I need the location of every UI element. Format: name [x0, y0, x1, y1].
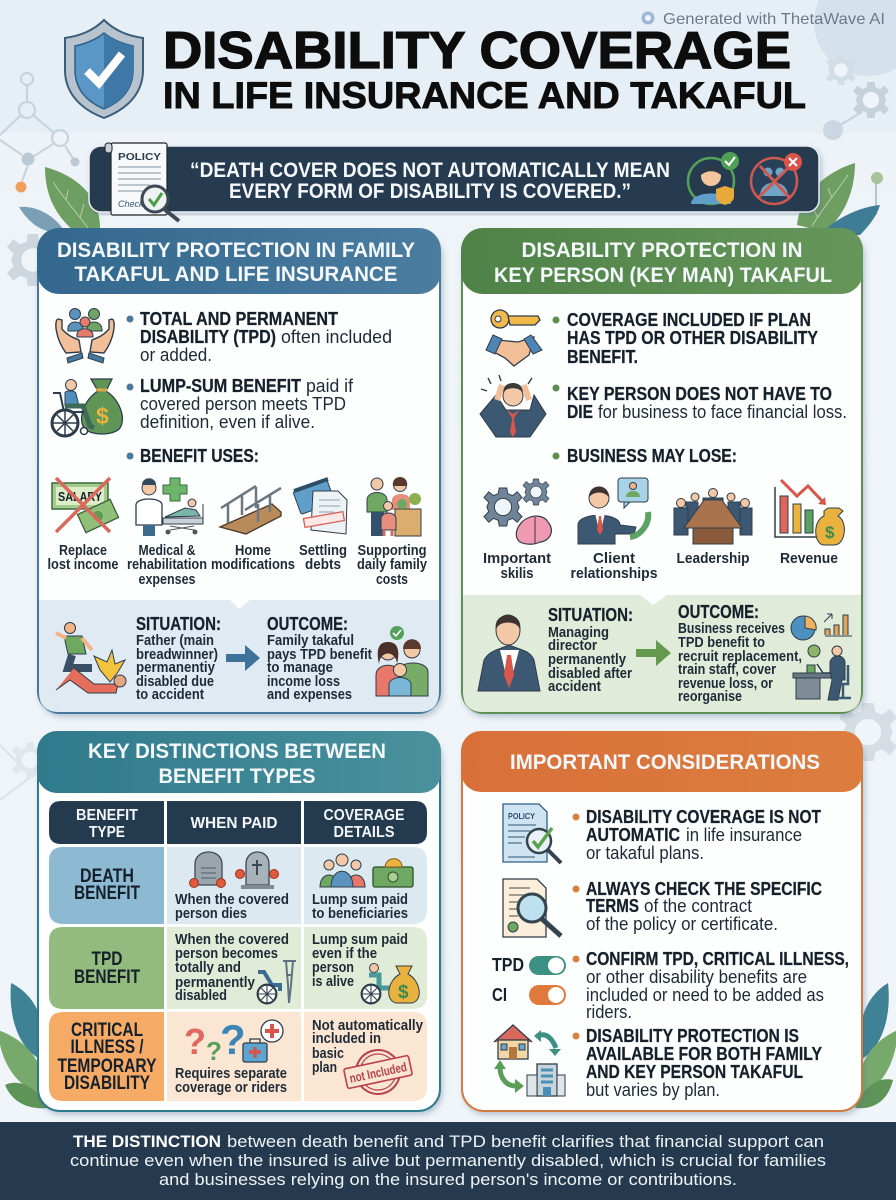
text: coverage details: person: [312, 959, 354, 976]
table header: COVERAGE: [324, 807, 405, 824]
use: settling debts: [293, 479, 347, 573]
title: DISABILITY COVERAGE: [163, 22, 791, 80]
text: lump sum: [126, 376, 354, 432]
text: when paid: [175, 891, 289, 922]
footer: between death benefit and TPD benefit clarifies that financial support can: [227, 1132, 824, 1151]
icon: policy check: [503, 804, 561, 863]
text: check terms: TERMS: [586, 896, 639, 916]
panel heading: DISABILITY PROTECTION IN FAMILY: [57, 239, 415, 262]
text: confirm benefits: [572, 949, 849, 1022]
use: medical and rehabilitation: rehabilitation: [127, 556, 207, 573]
text: lump sum: covered person meets TPD: [140, 394, 346, 414]
text: business may lose: BUSINESS MAY LOSE:: [567, 446, 737, 466]
leaves: top left: [19, 167, 100, 233]
lose: leadership: Leadership: [676, 550, 750, 567]
text: situation: director: [548, 637, 597, 654]
text: confirm benefits: or other disability benefits are: [586, 967, 807, 987]
text: outcome: income loss: [267, 673, 340, 690]
lose: leadership: [674, 488, 752, 567]
row: death benefit: DEATH: [80, 866, 134, 887]
quote text: “DEATH COVER DOES NOT AUTOMATICALLY MEAN: [190, 159, 670, 182]
text: situation: SITUATION:: [136, 614, 221, 634]
text: when paid: [175, 1065, 287, 1096]
quote text: [190, 159, 670, 203]
text: outcome: reorganise: [678, 688, 742, 705]
text: outcome: train staff, cover: [678, 661, 776, 678]
text: situation: Father (main: [136, 632, 214, 649]
text: when paid: [175, 931, 289, 1004]
title: IN LIFE INSURANCE AND TAKAFUL: [163, 75, 806, 116]
text: outcome: OUTCOME:: [678, 602, 759, 622]
icon: wheelchair and money bag: $: [398, 982, 409, 1003]
icon: family: [376, 626, 428, 696]
text: situation: disabled due: [136, 673, 214, 690]
leaves: bottom right: [855, 983, 896, 1108]
text: coverage details: included in: [312, 1030, 381, 1047]
lose: revenue: Revenue: [780, 550, 838, 567]
row: death benefit: BENEFIT: [74, 883, 140, 904]
stamp: not included: [341, 1044, 415, 1100]
text: when paid: totally and: [175, 959, 241, 976]
use: replace lost income: SALARY: [58, 489, 102, 504]
icon: wheelchair and money bag: $: [96, 403, 109, 429]
icon: tombstones: [190, 852, 278, 889]
text: situation: [548, 605, 633, 695]
icon: policy document: POLICY: [118, 151, 161, 163]
icon: questions and medical kit: ?: [220, 1016, 246, 1063]
text: outcome: to manage: [267, 659, 333, 676]
row: critical illness: [49, 1012, 427, 1101]
lose: client relationships: Client: [593, 550, 635, 567]
text: lump sum: paid if: [306, 376, 354, 396]
text: coverage details: Lump sum paid: [312, 931, 408, 948]
lose: revenue: [775, 480, 844, 567]
text: key person: KEY PERSON DOES NOT HAVE TO: [567, 384, 832, 404]
text: key person: DIE: [567, 402, 593, 422]
text: outcome: pays TPD benefit: [267, 646, 372, 663]
text: coverage included: COVERAGE INCLUDED IF PLAN: [567, 310, 811, 330]
text: confirm benefits: riders.: [586, 1002, 632, 1022]
panel heading: KEY PERSON (KEY MAN) TAKAFUL: [494, 264, 832, 287]
text: situation: breadwinner): [136, 646, 218, 663]
table header: TYPE: [89, 824, 125, 841]
text: lump sum: definition, even if alive.: [140, 412, 315, 432]
text: coverage included: BENEFIT.: [567, 347, 638, 367]
text: situation: permanently: [548, 651, 627, 668]
table header: BENEFIT: [76, 807, 138, 824]
text: situation: disabled after: [548, 665, 632, 682]
text: outcome: [267, 614, 372, 703]
text: situation: SITUATION:: [548, 605, 633, 625]
panel heading: DISABILITY PROTECTION IN: [522, 239, 802, 262]
text: situation: accident: [548, 678, 601, 695]
text: coverage details: basic: [312, 1045, 344, 1062]
text: outcome: and expenses: [267, 686, 352, 703]
panel heading: [37, 731, 441, 793]
text: check terms: of the policy or certificate.: [586, 914, 778, 934]
text: not automatic: [572, 807, 821, 863]
quote text: EVERY FORM OF DISABILITY IS COVERED.”: [229, 180, 631, 203]
lose: important skills: Important: [483, 550, 551, 567]
text: check terms: ALWAYS CHECK THE SPECIFIC: [586, 879, 822, 899]
toggle: CI: CI: [492, 985, 507, 1005]
text: available for both: AVAILABLE FOR BOTH FAMILY: [586, 1044, 822, 1064]
text: confirm benefits: CONFIRM TPD, CRITICAL ILLNESS,: [586, 949, 849, 969]
use: supporting daily family costs: [357, 477, 428, 588]
use: medical and rehabilitation: Medical &: [138, 542, 196, 559]
stamp: not included: not Included: [348, 1059, 408, 1086]
text: when paid: When the covered: [175, 931, 289, 948]
text: when paid: permanently: [175, 974, 256, 991]
arrow: [636, 640, 671, 666]
text: outcome: OUTCOME:: [267, 614, 348, 634]
panel: family takaful and life insurance: [37, 228, 441, 713]
text: outcome: [678, 602, 802, 705]
text: when paid: coverage or riders: [175, 1079, 287, 1096]
icon: wheelchair and money bag: [362, 964, 419, 1003]
footer: continue even when the insured is alive but permanently disabled, which is crucial for families: [70, 1151, 826, 1170]
text: coverage details: even if the: [312, 945, 377, 962]
use: supporting daily family costs: Supporting: [358, 542, 426, 559]
text: outcome: TPD benefit to: [678, 634, 765, 651]
footer: and businesses relying on the insured person's income or contributions.: [159, 1170, 737, 1189]
text: TPD: TOTAL AND PERMANENT: [140, 309, 338, 329]
icon: covered person: [688, 152, 739, 205]
panel: key distinctions: [0, 731, 896, 1200]
panel: key person takaful: [461, 228, 863, 713]
text: confirm benefits: included or need to be added as: [586, 985, 824, 1005]
panel heading: TAKAFUL AND LIFE INSURANCE: [74, 263, 398, 286]
icon: accident: [56, 622, 126, 693]
footer: THE DISTINCTION: [73, 1132, 221, 1151]
text: situation: permanentiy: [136, 659, 216, 676]
icon: policy check: POLICY: [508, 811, 535, 821]
icon: questions and medical kit: ?: [206, 1036, 222, 1066]
icon: shield with check: [65, 20, 143, 118]
text: coverage included: [552, 310, 818, 367]
use: replace lost income: Replace: [59, 542, 107, 559]
use: supporting daily family costs: costs: [376, 571, 408, 588]
icon: wheelchair and crutch: [258, 961, 296, 1003]
use: settling debts: debts: [305, 556, 341, 573]
text: coverage included: HAS TPD OR OTHER DISABILITY: [567, 328, 818, 348]
watermark: Generated with ThetaWave AI: [663, 11, 885, 28]
icon: questions and medical kit: [184, 1016, 283, 1066]
text: not automatic: DISABILITY COVERAGE IS NOT: [586, 807, 821, 827]
text: situation: [136, 614, 221, 703]
text: coverage details: to beneficiaries: [312, 905, 408, 922]
panel heading: BENEFIT TYPES: [158, 765, 316, 788]
title: [163, 22, 806, 116]
icon: questions and medical kit: ?: [184, 1021, 206, 1062]
text: TPD: often included: [281, 327, 392, 347]
text: situation: Managing: [548, 624, 609, 641]
text: available for both: but varies by plan.: [586, 1080, 720, 1100]
table header: WHEN PAID: [190, 815, 278, 832]
quote banner: [89, 143, 819, 221]
text: benefit uses: BENEFIT USES:: [140, 446, 259, 466]
text: coverage details: is alive: [312, 973, 354, 990]
text: coverage details: [312, 931, 408, 990]
use: medical and rehabilitation: expenses: [138, 571, 196, 588]
icon: charts and desk worker: [791, 614, 852, 700]
text: TPD: [126, 309, 392, 365]
text: check terms: of the contract: [644, 896, 752, 916]
use: home modifications: [211, 486, 295, 573]
text: when paid: person dies: [175, 905, 247, 922]
panel heading: [37, 228, 441, 294]
text: when paid: person becomes: [175, 945, 278, 962]
lose: revenue: $: [825, 523, 835, 542]
table header: DETAILS: [334, 824, 395, 841]
text: coverage details: [312, 1017, 424, 1076]
text: available for both: AND KEY PERSON TAKAFUL: [586, 1062, 803, 1082]
row: critical illness: TEMPORARY: [58, 1056, 157, 1077]
text: key person: for business to face financial loss.: [598, 402, 847, 422]
row: TPD benefit: [49, 927, 427, 1009]
icon: house and office: [494, 1025, 565, 1096]
toggle: CI: [492, 985, 566, 1005]
text: key person: [552, 384, 847, 422]
lose: client relationships: relationships: [570, 565, 658, 582]
table header: [49, 801, 427, 844]
text: outcome: Business receives: [678, 620, 785, 637]
icon: hands holding family: [56, 308, 114, 363]
row: TPD benefit: BENEFIT: [74, 967, 140, 988]
icon: policy document: [105, 143, 179, 221]
text: when paid: When the covered: [175, 891, 289, 908]
text: coverage details: plan: [312, 1059, 337, 1076]
text: when paid: disabled: [175, 987, 227, 1004]
use: home modifications: Home: [235, 542, 271, 559]
icon: stressed man: [480, 375, 546, 437]
text: available for both: DISABILITY PROTECTION IS: [586, 1026, 799, 1046]
lose: important skills: skilis: [500, 565, 534, 582]
use: supporting daily family costs: daily family: [357, 556, 428, 573]
text: TPD: or added.: [140, 345, 212, 365]
lose: important skills: [483, 479, 551, 582]
text: available for both: [572, 1026, 822, 1100]
text: when paid: Requires separate: [175, 1065, 287, 1082]
panel heading: [461, 228, 863, 294]
panel heading: KEY DISTINCTIONS BETWEEN: [88, 740, 386, 763]
text: not automatic: in life insurance: [686, 825, 802, 845]
icon: contract check: [503, 879, 561, 937]
toggle: TPD: [492, 955, 566, 975]
panel: important considerations: [461, 731, 863, 1111]
footer: [0, 1122, 896, 1200]
arrow: [226, 645, 260, 671]
lose: client relationships: [570, 478, 658, 582]
text: outcome: revenue loss, or: [678, 675, 773, 692]
row: critical illness: CRITICAL: [71, 1020, 143, 1041]
icon: not covered: [751, 153, 802, 204]
row: critical illness: DISABILITY: [64, 1073, 150, 1094]
row: death benefit: [49, 847, 427, 924]
row: critical illness: ILLNESS /: [70, 1037, 144, 1058]
use: replace lost income: [48, 478, 119, 573]
icon: wheelchair and money bag: [52, 379, 122, 436]
text: TPD: DISABILITY (TPD): [140, 327, 276, 347]
text: not automatic: or takaful plans.: [586, 843, 704, 863]
leaves: bottom left: [0, 983, 48, 1108]
panel heading: [461, 731, 863, 792]
leaves: top right: [797, 163, 880, 235]
text: situation: to accident: [136, 686, 204, 703]
text: lump sum: LUMP-SUM BENEFIT: [140, 376, 301, 396]
text: coverage details: [312, 891, 408, 922]
icon: policy document: Check: [118, 199, 144, 209]
text: coverage details: Not automatically: [312, 1017, 424, 1034]
use: medical and rehabilitation: [127, 478, 207, 588]
text: coverage details: Lump sum paid: [312, 891, 408, 908]
text: check terms: [572, 879, 822, 934]
panel heading: IMPORTANT CONSIDERATIONS: [510, 751, 820, 774]
text: not automatic: AUTOMATIC: [586, 825, 680, 845]
use: replace lost income: lost income: [48, 556, 118, 573]
row: TPD benefit: TPD: [92, 949, 122, 970]
text: outcome: recruit replacement,: [678, 648, 802, 665]
icon: managing director: [478, 615, 540, 691]
toggle: TPD: TPD: [492, 955, 524, 975]
text: outcome: Family takaful: [267, 632, 354, 649]
use: settling debts: Settling: [299, 542, 347, 559]
icon: beneficiaries and cash: [320, 854, 413, 887]
use: home modifications: modifications: [211, 556, 295, 573]
icon: key and handshake: [486, 310, 542, 366]
